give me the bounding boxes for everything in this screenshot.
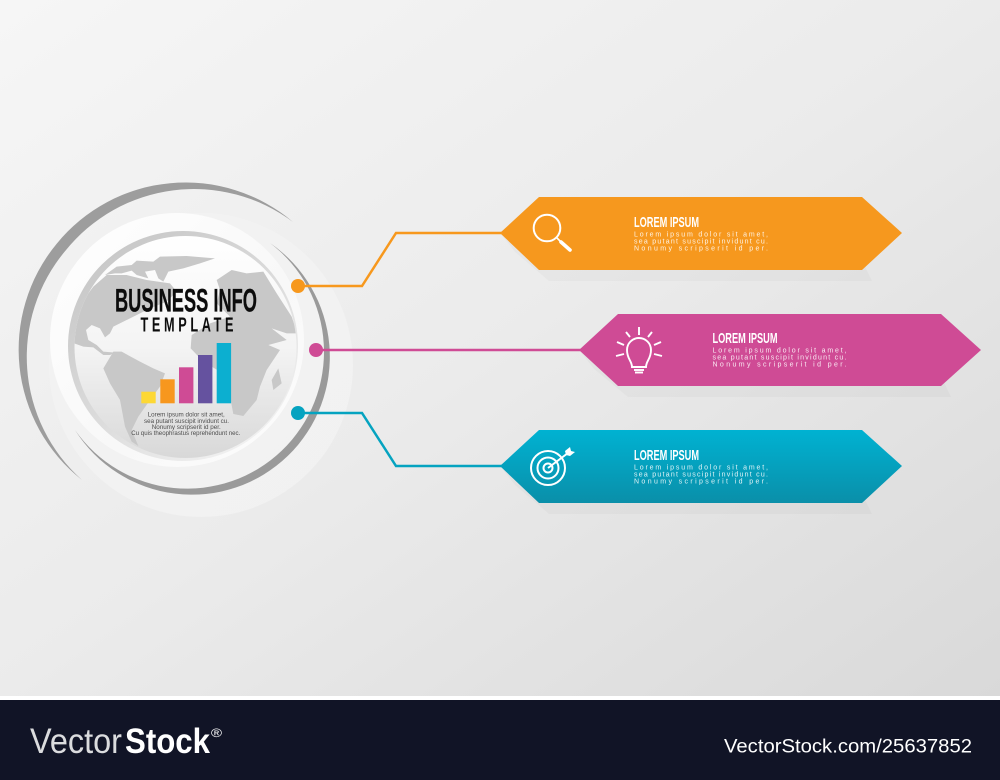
body text: Lorem ipsum dolor sit amet,	[634, 232, 768, 238]
outer crescent left	[19, 182, 293, 480]
soft outer halo	[49, 213, 353, 517]
body text: Lorem ipsum dolor sit amet,	[634, 464, 768, 472]
icon: light bulb	[616, 327, 662, 372]
globe caption text: Lorem ipsum dolor sit amet,	[148, 412, 225, 419]
globe caption text	[131, 412, 241, 437]
white rim	[50, 213, 304, 467]
globe ring	[68, 231, 298, 461]
connector: pink	[309, 343, 582, 357]
body text	[634, 464, 768, 485]
globe caption text: sea putant suscipit invidunt cu.	[144, 418, 229, 425]
outer crescent right	[75, 243, 330, 495]
circular globe emblem	[18, 182, 330, 495]
heading: LOREM IPSUM	[712, 330, 778, 347]
title: business info: BUSINESS INFO	[115, 282, 257, 318]
logo: VectorStock: Stock	[125, 722, 210, 761]
heading: LOREM IPSUM	[634, 214, 699, 231]
body text: sea putant suscipit invidunt cu.	[712, 354, 847, 362]
banner shadows	[500, 233, 951, 514]
globe caption text: Nonumy scripserit id per.	[152, 424, 221, 431]
globe caption text: Cu quis theophrastus reprehendunt nec.	[131, 430, 241, 437]
globe disc	[74, 236, 296, 458]
heading: LOREM IPSUM	[634, 447, 699, 464]
body text: Nonumy scripserit id per.	[634, 478, 768, 485]
logo: VectorStock: ®	[211, 726, 222, 740]
world map continents	[74, 256, 297, 446]
body text: Lorem ipsum dolor sit amet,	[712, 348, 847, 354]
connector: teal	[291, 406, 502, 466]
body text: sea putant suscipit invidunt cu.	[634, 238, 768, 246]
body text	[634, 232, 768, 252]
body text: Nonumy scripserit id per.	[634, 245, 768, 252]
body text: sea putant suscipit invidunt cu.	[634, 472, 768, 478]
logo: VectorStock: Vector	[30, 722, 122, 761]
icon: magnifying glass	[534, 215, 570, 250]
panel: pink banner	[579, 314, 981, 386]
panel: orange banner	[500, 197, 902, 270]
footer bar	[0, 700, 1000, 780]
panel: teal banner	[500, 430, 902, 503]
icon: target with arrow	[531, 447, 575, 485]
body text: Nonumy scripserit id per.	[712, 361, 847, 368]
connector: orange	[291, 233, 502, 293]
body text	[712, 348, 847, 368]
subtitle: template: TEMPLATE	[140, 313, 234, 336]
image id: VectorStock.com/25637852	[724, 736, 972, 758]
logo: VectorStock	[30, 722, 222, 761]
bar chart	[141, 343, 231, 403]
